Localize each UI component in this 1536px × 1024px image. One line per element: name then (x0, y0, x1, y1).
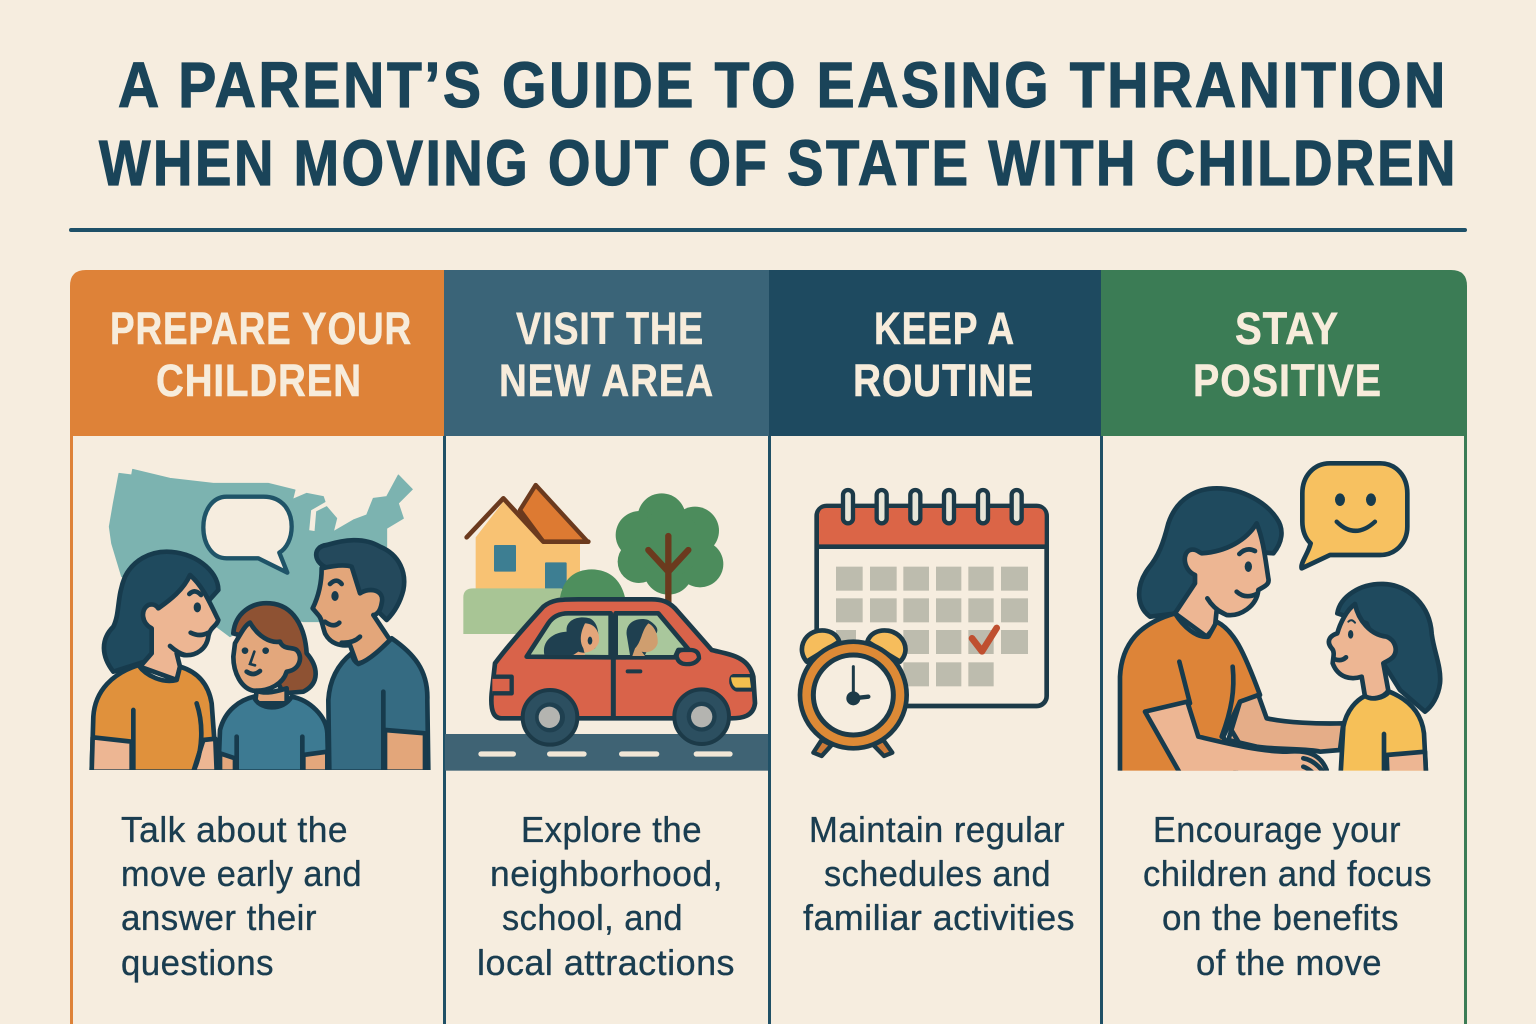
figure: mother (92, 552, 218, 772)
illustration: mother reassuring child (1120, 463, 1440, 773)
text: visit the new area (477, 809, 735, 983)
figure: child (218, 603, 328, 772)
header: stay positive: STAY (1235, 303, 1339, 354)
text: visit the new area: school, and (502, 897, 683, 938)
text: prepare your children: move early and (121, 853, 362, 894)
figure: father (313, 540, 428, 772)
header: visit the new area: NEW AREA (499, 355, 714, 406)
text: prepare your children (121, 809, 362, 983)
header: keep a routine (769, 270, 1101, 436)
illustration: car in front of house and tree (445, 485, 770, 771)
header: prepare your children: PREPARE YOUR (110, 303, 412, 354)
text: stay positive (1143, 809, 1432, 983)
header: keep a routine: ROUTINE (853, 355, 1034, 406)
icon: speech bubble (203, 497, 292, 573)
icon: tree (616, 493, 723, 603)
header: visit the new area: VISIT THE (516, 303, 704, 354)
figure: child (1329, 584, 1440, 773)
icon: red check mark (972, 628, 997, 651)
illustration: calendar and alarm clock (800, 490, 1047, 756)
illustration: family talking before US map (92, 469, 428, 772)
text: stay positive: on the benefits (1162, 897, 1399, 938)
text: stay positive: children and focus (1143, 853, 1432, 894)
header: prepare your children: CHILDREN (156, 355, 362, 406)
figure: mother (1120, 488, 1343, 773)
panel: visit the new area (443, 270, 770, 1024)
panel: keep a routine (768, 270, 1101, 1024)
text: prepare your children: questions (121, 942, 274, 983)
text: keep a routine: Maintain regular (809, 809, 1065, 850)
text: visit the new area: neighborhood, (490, 853, 723, 894)
text: prepare your children: answer their (121, 897, 317, 938)
panel: prepare your children (70, 270, 444, 1024)
header: stay positive (1101, 270, 1467, 436)
text: keep a routine (803, 809, 1075, 938)
text: stay positive: Encourage your (1153, 809, 1401, 850)
text: keep a routine: familiar activities (803, 897, 1075, 938)
title (99, 49, 1458, 199)
icon: smiley speech bubble (1301, 463, 1407, 568)
icon: road (445, 734, 770, 771)
icon: calendar (817, 490, 1047, 706)
header: visit the new area (444, 270, 769, 436)
text: prepare your children: Talk about the (121, 809, 348, 850)
text: stay positive: of the move (1196, 942, 1382, 983)
header: prepare your children (70, 270, 444, 436)
icon: red car with passengers (491, 599, 755, 745)
header: keep a routine: KEEP A (874, 303, 1015, 354)
panel: stay positive (1100, 270, 1467, 1024)
icon: house (463, 485, 625, 634)
header: stay positive: POSITIVE (1193, 355, 1382, 406)
text: visit the new area: local attractions (477, 942, 735, 983)
text: visit the new area: Explore the (521, 809, 702, 850)
icon: US map (109, 469, 412, 637)
icon: alarm clock (800, 630, 907, 756)
text: keep a routine: schedules and (824, 853, 1051, 894)
